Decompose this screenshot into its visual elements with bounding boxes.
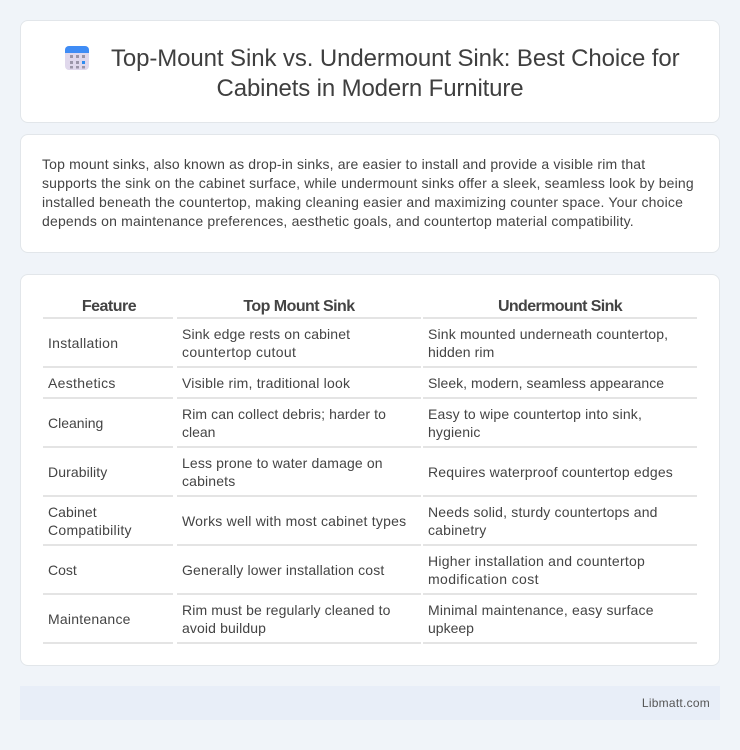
intro text: installed beneath the countertop, making cleaning easier and maximizing counter space. Your choice [42,194,683,210]
title: Top-Mount Sink vs. Undermount Sink: Best Choice for [111,45,680,72]
comparison table: Sleek, modern, seamless appearance [428,375,664,391]
comparison table: avoid buildup [182,620,266,636]
comparison table: Cabinet [48,504,97,520]
title: Cabinets in Modern Furniture [217,75,523,102]
comparison table: countertop cutout [182,344,296,360]
comparison table: cabinetry [428,522,486,538]
comparison table [43,298,697,644]
comparison table: Requires waterproof countertop edges [428,464,673,480]
comparison table: Rim must be regularly cleaned to [182,602,390,618]
comparison table: Works well with most cabinet types [182,513,406,529]
header panel [20,20,720,123]
comparison table: Durability [48,464,107,480]
footer bar [20,686,720,720]
title [111,45,680,102]
comparison table: Maintenance [48,611,131,627]
comparison table: modification cost [428,571,539,587]
comparison table: upkeep [428,620,474,636]
comparison table: Installation [48,335,118,351]
comparison table: Generally lower installation cost [182,562,384,578]
comparison table: Higher installation and countertop [428,553,645,569]
comparison table: Minimal maintenance, easy surface [428,602,654,618]
comparison table: Top Mount Sink [243,298,355,315]
comparison table: Rim can collect debris; harder to [182,406,386,422]
intro text: depends on maintenance preferences, aesthetic goals, and countertop material compatibility. [42,213,634,229]
comparison table: hidden rim [428,344,494,360]
comparison table: cabinets [182,473,235,489]
intro text: Top mount sinks, also known as drop-in sinks, are easier to install and provide a visible rim that [42,156,645,172]
comparison table: Compatibility [48,522,132,538]
comparison table: Needs solid, sturdy countertops and [428,504,658,520]
comparison table: Easy to wipe countertop into sink, [428,406,642,422]
intro text [42,156,694,229]
comparison table: Feature [82,298,136,315]
comparison table: Cleaning [48,415,103,431]
icon: calendar grid [65,46,89,70]
footer text: Libmatt.com [642,696,710,710]
comparison table: hygienic [428,424,481,440]
intro panel [20,134,720,253]
comparison table: Aesthetics [48,375,116,391]
table panel [20,274,720,666]
comparison table: Cost [48,562,77,578]
comparison table: Sink mounted underneath countertop, [428,326,668,342]
comparison table: clean [182,424,215,440]
comparison table: Undermount Sink [498,298,622,315]
comparison table: Sink edge rests on cabinet [182,326,350,342]
comparison table: Visible rim, traditional look [182,375,350,391]
comparison table: Less prone to water damage on [182,455,383,471]
intro text: supports the sink on the cabinet surface, while undermount sinks offer a sleek, seamless look by being [42,175,694,191]
